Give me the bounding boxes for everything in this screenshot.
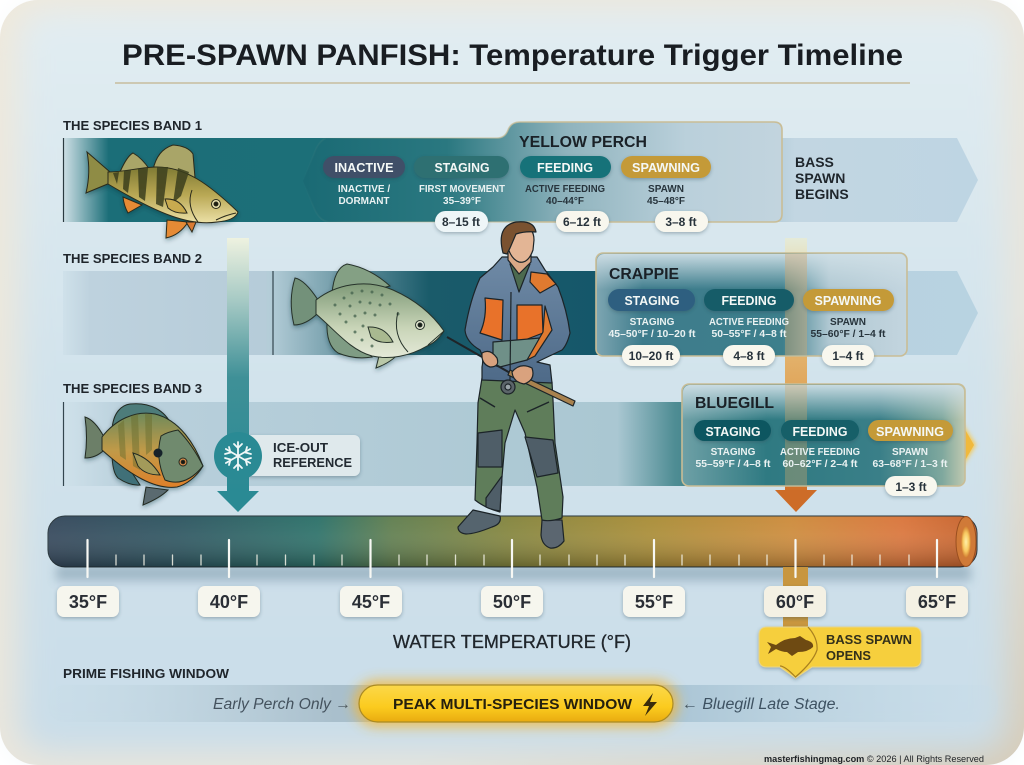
band 1 label: THE SPECIES BAND 1 [63, 118, 202, 133]
65°F: 65°F [918, 592, 956, 612]
rod [447, 337, 575, 406]
depth 6-12 ft [556, 211, 609, 232]
pill: staging [608, 289, 695, 311]
feeding detail: ACTIVE FEEDING [709, 317, 789, 328]
45°F: 45°F [352, 592, 390, 612]
depth 4-8 ft: 4–8 ft [733, 349, 765, 363]
peak multi-species window pill: PEAK MULTI-SPECIES WINDOW [393, 696, 633, 713]
depth 10-20 ft: 10–20 ft [629, 349, 673, 363]
staging detail: 45–50°F / 10–20 ft [608, 329, 696, 340]
spawning detail: SPAWN [830, 317, 866, 328]
prime window label: PRIME FISHING WINDOW [63, 666, 230, 681]
axis title: WATER TEMPERATURE (°F) [393, 632, 631, 652]
credit line: masterfishingmag.com © 2026 | All Rights Reserved [764, 754, 984, 764]
staging detail: STAGING [630, 317, 675, 328]
bluegill late stage text: ← Bluegill Late Stage. [682, 696, 840, 713]
temperature labels [57, 586, 968, 617]
callout text: OPENS [826, 648, 871, 663]
feeding detail: ACTIVE FEEDING [525, 184, 605, 195]
reel [501, 380, 515, 394]
spawning detail: 45–48°F [647, 196, 685, 207]
spawning detail: 63–68°F / 1–3 ft [872, 459, 948, 470]
depth 1-3 ft [885, 476, 937, 496]
55°F: 55°F [635, 592, 673, 612]
band 3 label: THE SPECIES BAND 3 [63, 381, 202, 396]
staging detail: FIRST MOVEMENT [419, 184, 505, 195]
boots [458, 510, 564, 548]
pill: feeding [704, 289, 794, 311]
temperature ticks [88, 540, 937, 577]
icon: lightning bolt [643, 693, 657, 716]
pill: feeding: FEEDING [722, 293, 776, 308]
40°F [198, 586, 260, 617]
bass spawn begins label: BEGINS [795, 186, 849, 202]
depth 1-4 ft: 1–4 ft [832, 349, 864, 363]
ice-out reference arrow [217, 238, 259, 512]
feeding detail: 60–62°F / 2–4 ft [782, 459, 858, 470]
crappie name: CRAPPIE [609, 266, 679, 283]
feeding detail: ACTIVE FEEDING [780, 447, 860, 458]
45°F [340, 586, 402, 617]
depth 6-12 ft: 6–12 ft [563, 215, 601, 229]
pill: feeding: FEEDING [792, 424, 848, 439]
fish: bluegill [85, 404, 203, 505]
hands [482, 351, 533, 384]
inactive detail: INACTIVE / [338, 184, 390, 195]
callout text: BASS SPAWN [826, 632, 912, 647]
panel: bluegill [682, 384, 965, 496]
pill: staging: STAGING [434, 160, 490, 175]
pill: spawning [868, 420, 953, 441]
icon: snowflake badge [214, 432, 262, 480]
depth 8-15 ft [435, 211, 488, 232]
feeding detail: 50–55°F / 4–8 ft [712, 329, 787, 340]
pill: staging: STAGING [624, 293, 680, 308]
species band 3 arrow [63, 402, 700, 486]
ice-out label: REFERENCE [273, 455, 352, 470]
depth 8-15 ft: 8–15 ft [442, 215, 480, 229]
50°F [481, 586, 543, 617]
bass spawn begins label: BASS [795, 154, 834, 170]
staging detail: STAGING [711, 447, 756, 458]
bar end cap [956, 516, 976, 566]
band 2 label: THE SPECIES BAND 2 [63, 251, 202, 266]
panel: yellow perch [303, 122, 782, 232]
temperature bar [48, 516, 977, 581]
depth 3-8 ft: 3–8 ft [665, 215, 697, 229]
ice-out label: ICE-OUT [273, 440, 328, 455]
bass spawn opens callout [759, 627, 921, 678]
35°F: 35°F [69, 592, 107, 612]
head [501, 222, 536, 274]
title: PRE-SPAWN PANFISH: Temperature Trigger Timeline [122, 39, 903, 72]
early perch text: Early Perch Only → [213, 696, 351, 713]
pill: spawning [803, 289, 894, 311]
prime window track [48, 685, 998, 722]
40°F: 40°F [210, 592, 248, 612]
trousers [475, 378, 563, 521]
icon: bass silhouette [767, 636, 813, 656]
pill: spawning: SPAWNING [632, 160, 700, 175]
depth 10-20 ft [622, 345, 680, 366]
bluegill name: BLUEGILL [695, 395, 774, 412]
panel: crappie [596, 253, 907, 366]
50°F: 50°F [493, 592, 531, 612]
65°F [906, 586, 968, 617]
depth 1-4 ft [822, 345, 874, 366]
spawning detail: 55–60°F / 1–4 ft [810, 329, 886, 340]
pill: staging [694, 420, 771, 441]
depth 4-8 ft [723, 345, 775, 366]
pill: staging [414, 156, 509, 178]
spawning detail: SPAWN [648, 184, 684, 195]
jacket [465, 257, 570, 383]
pill: feeding [520, 156, 611, 178]
peak multi-species window pill [354, 680, 678, 727]
bass spawn begins label: SPAWN [795, 170, 845, 186]
pill: spawning: SPAWNING [814, 293, 882, 308]
depth 3-8 ft [655, 211, 708, 232]
55°F [623, 586, 685, 617]
feeding detail: 40–44°F [546, 196, 584, 207]
inactive detail: DORMANT [338, 196, 390, 207]
fish: crappie [291, 264, 444, 368]
pill: inactive: INACTIVE [334, 160, 394, 175]
60°F: 60°F [776, 592, 814, 612]
35°F [57, 586, 119, 617]
60°F [764, 586, 826, 617]
bass spawn column arrow [775, 238, 817, 512]
species band 1 arrow [63, 138, 978, 222]
pill: feeding [781, 420, 859, 441]
pill: inactive [323, 156, 405, 178]
depth 1-3 ft: 1–3 ft [895, 480, 927, 494]
bass column below bar [783, 567, 808, 629]
staging detail: 55–59°F / 4–8 ft [696, 459, 771, 470]
species band 2 arrow [63, 271, 978, 355]
perch name: YELLOW PERCH [519, 134, 647, 151]
ice-out label [246, 435, 360, 476]
pill: spawning [621, 156, 711, 178]
glowing arrow tip of band 3 [960, 420, 976, 470]
staging detail: 35–39°F [443, 196, 481, 207]
pill: spawning: SPAWNING [876, 424, 944, 439]
fish: yellow perch [86, 145, 238, 238]
spawning detail: SPAWN [892, 447, 928, 458]
pill: feeding: FEEDING [537, 160, 593, 175]
angler figure [447, 222, 575, 548]
pill: staging: STAGING [706, 424, 760, 439]
